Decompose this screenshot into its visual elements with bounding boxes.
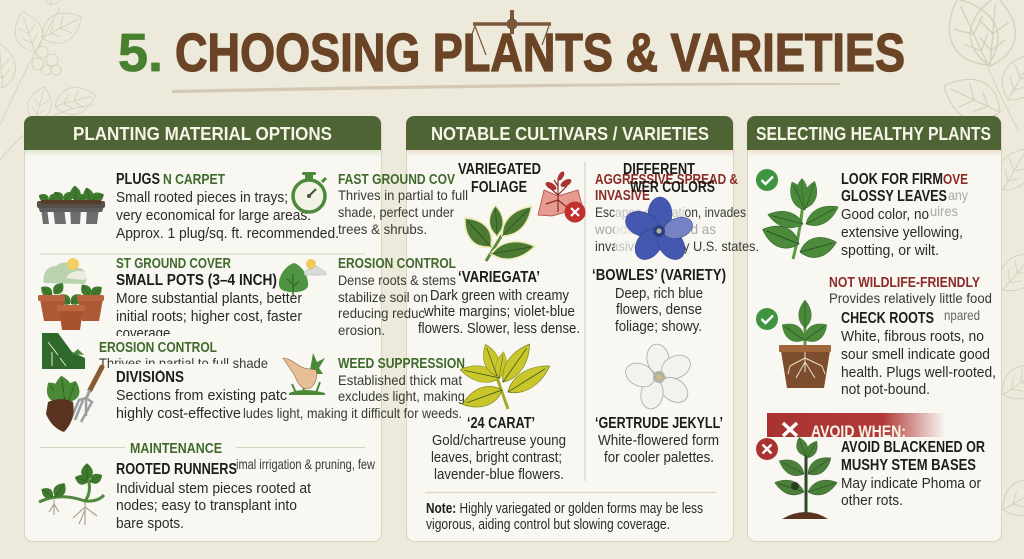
block: bowles: ‘BOWLES’ (VARIETY) (592, 267, 726, 284)
icon: potted plant with visible roots (778, 300, 831, 388)
heading: SELECTING HEALTHY PLANTS (756, 123, 991, 144)
block: rooted runners (116, 461, 312, 532)
icon: three seedlings in terracotta pots (38, 280, 105, 330)
underlying block: not wildlife friendly: uires (930, 203, 958, 219)
icon: blue periwinkle flower (615, 197, 696, 265)
note: vigorous, aiding control but slowing coverage. (426, 517, 670, 533)
underlying block: erosion control: stabilize soil on (338, 289, 428, 305)
block: check roots: health. Plugs well-rooted, (841, 364, 996, 381)
block: check roots (841, 310, 996, 398)
block: different flower colors heading (623, 161, 715, 196)
block: divisions: DIVISIONS (116, 369, 184, 386)
underlying block: aggressive spread: AGGRESSIVE SPREAD & (595, 172, 738, 188)
icon: plug tray (37, 185, 106, 224)
panel: planting material options (24, 116, 382, 542)
underlying block: not wildlife friendly: Provides relatively little food (829, 290, 992, 306)
block: gertrude jekyll: ‘GERTRUDE JEKYLL’ (595, 415, 723, 432)
icon: variegated leaves (457, 200, 538, 262)
icon: sick plant with rotting base (773, 436, 839, 519)
block: plugs: N CARPET (163, 172, 225, 188)
block: avoid blackened stem bases: May indicate Phoma or (841, 475, 981, 492)
block: bowles: Deep, rich blue (615, 285, 703, 302)
block: plugs (116, 171, 339, 242)
underlying block: aggressive spread: woodlands; listed as (594, 221, 716, 237)
title number: 5. (118, 23, 163, 83)
block: maintenance: imal irrigation & pruning, few (236, 456, 376, 472)
underlying block: not wildlife friendly (829, 172, 992, 323)
block: gertrude jekyll: White-flowered form (598, 432, 719, 449)
title underline (172, 83, 840, 93)
block: 24 carat: lavender-blue flowers. (434, 466, 564, 483)
block: look for firm glossy leaves: spotting, or wilt. (841, 242, 939, 259)
icon: white flower (622, 342, 694, 411)
block: small pots: initial roots; higher cost, faster (116, 308, 302, 325)
underlying block: fast ground cover: Thrives in partial to full (338, 187, 468, 203)
underlying block: fast ground cover: trees & shrubs. (338, 221, 427, 237)
underlying block: fast ground cover (338, 172, 468, 237)
block: look for firm glossy leaves: Good color, no (841, 206, 929, 223)
block: bowles: flowers, dense (616, 301, 702, 318)
botanical decoration: right edge (990, 141, 1024, 525)
block: avoid blackened stem bases (841, 439, 985, 509)
block: avoid blackened stem bases: other rots. (841, 492, 903, 509)
underlying block: erosion control: erosion. (338, 322, 385, 338)
block: divisions (116, 369, 462, 422)
block: small pots: SMALL POTS (3–4 INCH) (116, 272, 277, 289)
block: gertrude jekyll: for cooler palettes. (604, 449, 714, 466)
block: 24 carat (431, 415, 566, 483)
underlying block: weed suppression: Established thick mat (338, 372, 462, 388)
block: variegata (418, 269, 580, 337)
underlying block: fast ground cover: FAST GROUND COV (338, 172, 455, 188)
underlying block: erosion control: EROSION CONTROL (338, 256, 456, 272)
underlying block: fast ground cover: shade, perfect under (338, 204, 454, 220)
block: plugs: Small rooted pieces in trays; (116, 189, 288, 206)
block: divisions: Sections from existing patc (116, 387, 287, 404)
avoid when banner (767, 413, 945, 443)
block: different flower colors heading: DIFFERENT (623, 161, 695, 178)
block: variegata: flowers. Slower, less dense. (418, 320, 580, 337)
underlying block: aggressive spread: Escapes cultivation, invades (595, 204, 746, 220)
overlay block: erosion control: Thrives in partial to full shade (99, 355, 268, 371)
block: plugs: very economical for large areas. (116, 207, 311, 224)
underlying block: aggressive spread: INVASIVE (595, 188, 650, 204)
block: small pots: coverage. (116, 325, 174, 342)
block: look for firm glossy leaves (841, 171, 963, 259)
block: maintenance (130, 441, 376, 472)
underlying block: aggressive spread: invasive in many U.S. states. (595, 238, 759, 254)
block: variegated foliage heading (458, 161, 541, 196)
block: maintenance: MAINTENANCE (130, 441, 222, 457)
note: Note: Highly variegated or golden forms may be less (426, 501, 703, 517)
heading: NOTABLE CULTIVARS / VARIETIES (431, 123, 709, 144)
block: plugs: PLUGS (116, 171, 160, 188)
underlying block: not wildlife friendly: OVE (943, 172, 968, 188)
icon: sun and cloud (304, 259, 326, 275)
block: look for firm glossy leaves: LOOK FOR FIRM (841, 171, 943, 188)
block: gertrude jekyll (595, 415, 723, 466)
underlying block: erosion control: Dense roots & stems (338, 272, 456, 288)
block: divisions: ludes light, making it difficult for weeds. (243, 405, 462, 421)
white mask clipping erosion text (112, 364, 232, 370)
block: rooted runners: ROOTED RUNNERS (116, 461, 237, 478)
overlay block: erosion control: EROSION CONTROL (99, 340, 217, 356)
underlying block: weed suppression: excludes light, making (338, 388, 465, 404)
icon: tree (279, 263, 308, 297)
underlying block: not wildlife friendly: NOT WILDLIFE-FRIENDLY (829, 275, 980, 291)
block: 24 carat: leaves, bright contrast; (431, 449, 562, 466)
block: rooted runners: nodes; easy to transplant into (116, 497, 297, 514)
underlying block: erosion control (338, 256, 456, 338)
block: divisions: highly cost-effective (116, 405, 241, 422)
icon: stopwatch (293, 172, 326, 212)
overlay block: erosion control (99, 340, 268, 371)
icon: erosion slope (42, 333, 85, 369)
note (426, 501, 703, 533)
block: avoid blackened stem bases: MUSHY STEM BASES (841, 457, 976, 474)
icon: ground cover and sun behind pots (44, 258, 86, 284)
block: 24 carat: Gold/chartreuse young (432, 432, 566, 449)
icon: hand pulling weed (283, 353, 325, 395)
block: bowles (592, 267, 726, 335)
block: variegated foliage heading: FOLIAGE (471, 179, 527, 196)
block: check roots: White, fibrous roots, no (841, 328, 984, 345)
underlying block: not wildlife friendly: any (948, 187, 968, 203)
icon: golden leaves (459, 339, 554, 413)
title main text: CHOOSING PLANTS & VARIETIES (175, 23, 905, 83)
icon: invasive map warning (538, 170, 586, 222)
block: check roots: CHECK ROOTS (841, 310, 934, 327)
block: variegated foliage heading: VARIEGATED (458, 161, 541, 178)
botanical decoration: top left (0, 0, 99, 160)
block: 24 carat: ‘24 CARAT’ (467, 415, 535, 432)
white mask clipping coverage (108, 336, 208, 342)
underlying block: weed suppression (338, 356, 465, 404)
panel: selecting healthy plants (747, 116, 1002, 542)
block: small pots (116, 256, 302, 342)
block: look for firm glossy leaves: GLOSSY LEAVES (841, 188, 947, 205)
block: rooted runners: Individual stem pieces rooted at (116, 480, 312, 497)
block: check roots: sour smell indicate good (841, 346, 990, 363)
block: rooted runners: bare spots. (116, 515, 184, 532)
block: small pots: More substantial plants, better (116, 290, 302, 307)
icon: check badge glossy leaves (756, 169, 778, 191)
underlying block: aggressive spread (594, 172, 759, 254)
icon: warning badge (756, 438, 778, 460)
block: bowles: foliage; showy. (615, 318, 702, 335)
heading: PLANTING MATERIAL OPTIONS (73, 123, 332, 144)
block: variegata: Dark green with creamy (430, 287, 569, 304)
block: variegata: ‘VARIEGATA’ (458, 269, 540, 286)
icon: healthy glossy plant (759, 178, 842, 261)
underlying block: not wildlife friendly: npared (944, 307, 980, 323)
block: different flower colors heading: WER COLORS (630, 179, 715, 196)
underlying block: weed suppression: WEED SUPPRESSION (338, 356, 465, 372)
block: small pots: ST GROUND COVER (116, 256, 231, 272)
icon: balance scale (470, 10, 551, 55)
block: check roots: not pot-bound. (841, 381, 930, 398)
botanical decoration: top right (936, 0, 1024, 130)
block: variegata: white margins; violet-blue (423, 303, 575, 320)
icon: division clump with garden fork (42, 367, 102, 432)
icon: check badge roots (756, 308, 778, 330)
avoid when banner: AVOID WHEN: (811, 422, 906, 441)
icon: rooted runners (39, 463, 105, 525)
block: avoid blackened stem bases: AVOID BLACKENED OR (841, 439, 985, 456)
block: plugs: Approx. 1 plug/sq. ft. recommended. (116, 225, 339, 242)
underlying block: erosion control: reducing reduc (338, 305, 425, 321)
panel: notable cultivars (406, 116, 734, 542)
block: look for firm glossy leaves: extensive yellowing, (841, 224, 963, 241)
